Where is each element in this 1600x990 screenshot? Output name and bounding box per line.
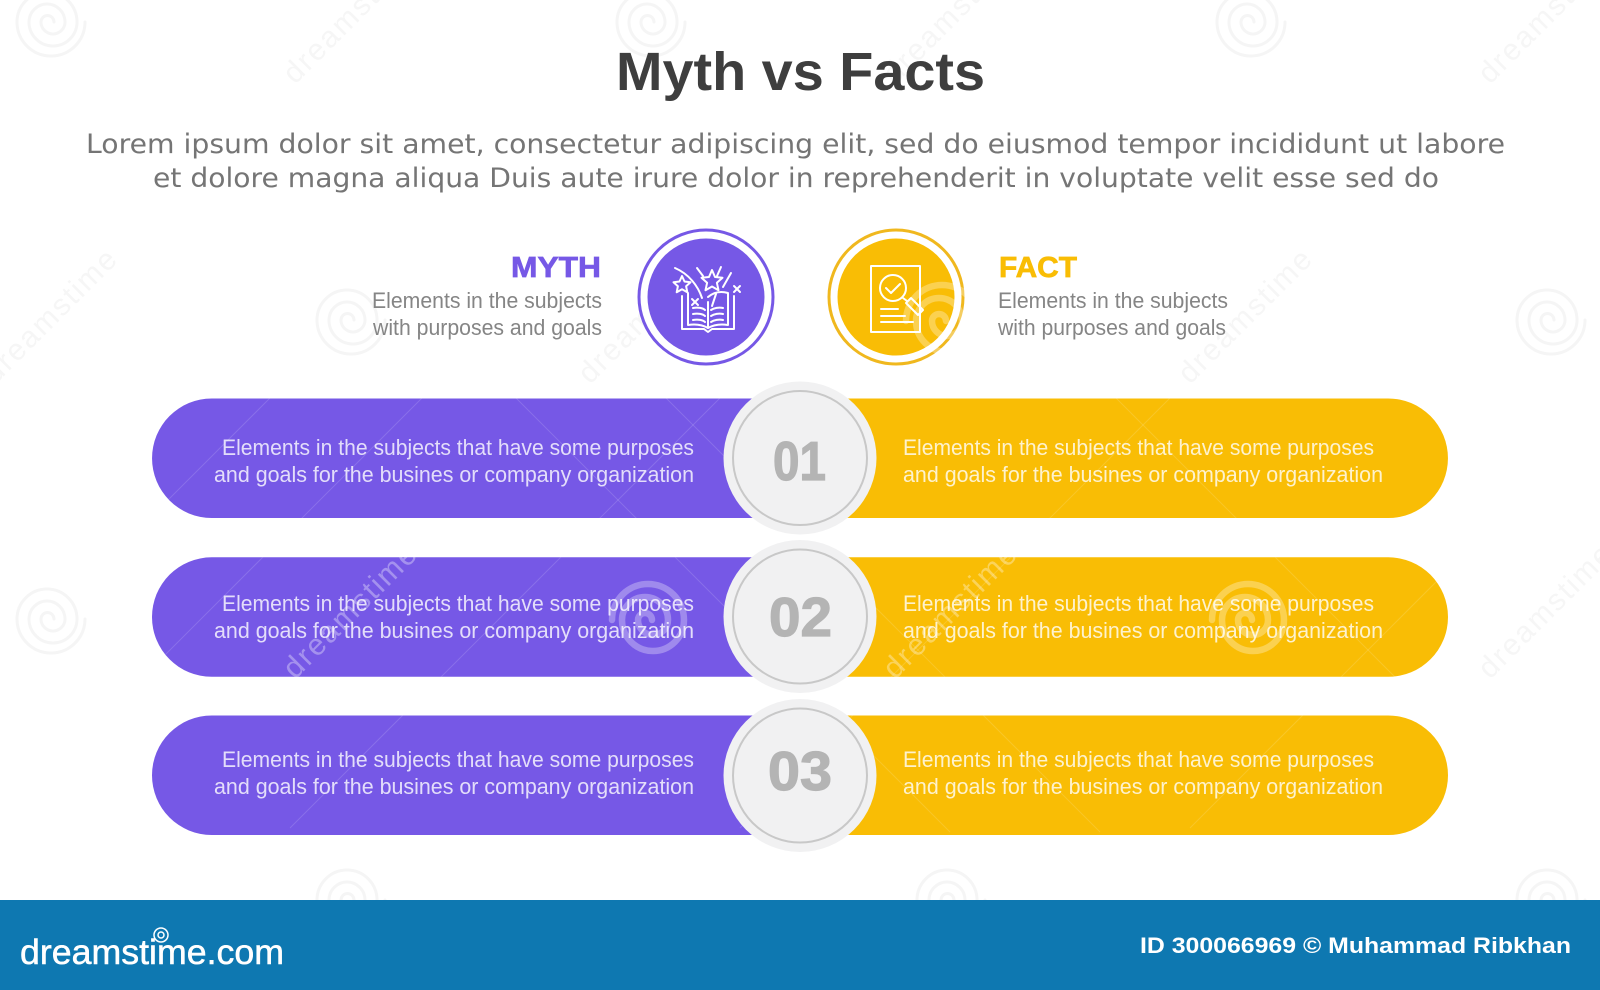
myth heading: MYTH: [511, 252, 601, 284]
myth description: with purposes and goals: [372, 315, 602, 340]
text: dreamstime: [877, 537, 1025, 685]
fact description: Elements in the subjects: [998, 288, 1228, 313]
fact bar 1: [800, 398, 1448, 518]
myth description: Elements in the subjects: [372, 288, 602, 313]
fact heading: FACT: [999, 252, 1077, 284]
row 2 text: and goals for the busines or company organization: [214, 618, 694, 643]
row 1 text: and goals for the busines or company organization: [903, 462, 1383, 487]
number badge 01: 01: [773, 430, 826, 492]
text: dreamstime: [572, 242, 720, 390]
row 2 text: [214, 591, 1383, 643]
row 1 text: Elements in the subjects that have some purposes: [222, 435, 694, 460]
number badge 01: [724, 382, 876, 534]
row 1: [152, 398, 1448, 518]
row 1 text: and goals for the busines or company organization: [214, 462, 694, 487]
footer banner: [0, 900, 1600, 990]
text: dreamstime: [277, 537, 425, 685]
fact bar 3: [800, 716, 1448, 835]
row 2 text: Elements in the subjects that have some purposes: [903, 591, 1374, 616]
text: dreamstime: [1172, 242, 1320, 390]
subtitle text: Lorem ipsum dolor sit amet, consectetur adipiscing elit, sed do eiusmod tempor incididunt ut labore: [86, 129, 1505, 160]
fact description: with purposes and goals: [997, 315, 1226, 340]
panel: fact header: [829, 230, 1228, 364]
row 3: [152, 716, 1448, 835]
number badge 03: 03: [768, 740, 832, 802]
myth description: [372, 288, 602, 340]
row 2 text: and goals for the busines or company organization: [903, 618, 1383, 643]
image credit: ID 300066969 © Muhammad Ribkhan: [1140, 933, 1571, 958]
icon: document with magnifier: [829, 230, 963, 364]
row 3 text: and goals for the busines or company organization: [903, 774, 1383, 799]
subtitle text: et dolore magna aliqua Duis aute irure dolor in reprehenderit in voluptate velit esse sed do: [153, 163, 1439, 194]
row 1 text: Elements in the subjects that have some purposes: [903, 435, 1374, 460]
row 3 text: [214, 747, 1383, 799]
row 3 text: Elements in the subjects that have some purposes: [222, 747, 694, 772]
row 3 text: and goals for the busines or company organization: [214, 774, 694, 799]
myth bar 3: [152, 716, 800, 835]
number badge 02: 02: [769, 586, 832, 648]
myth bar 1: [152, 398, 800, 518]
row 3 text: Elements in the subjects that have some purposes: [903, 747, 1374, 772]
icon: open book with stars: [639, 230, 773, 364]
row 1 text: [214, 435, 1383, 487]
fact description: [997, 288, 1228, 340]
panel: myth header: [372, 230, 773, 364]
row 2 text: Elements in the subjects that have some purposes: [222, 591, 694, 616]
footer logo: dreamstime.com: [20, 933, 284, 972]
fact bar 2: [800, 557, 1448, 677]
subtitle text: [86, 129, 1505, 194]
myth bar 2: [152, 557, 800, 677]
title: Myth vs Facts: [616, 42, 985, 102]
number badge 03: [724, 699, 876, 852]
number badge 02: [724, 540, 876, 693]
row 2: [152, 557, 1448, 677]
